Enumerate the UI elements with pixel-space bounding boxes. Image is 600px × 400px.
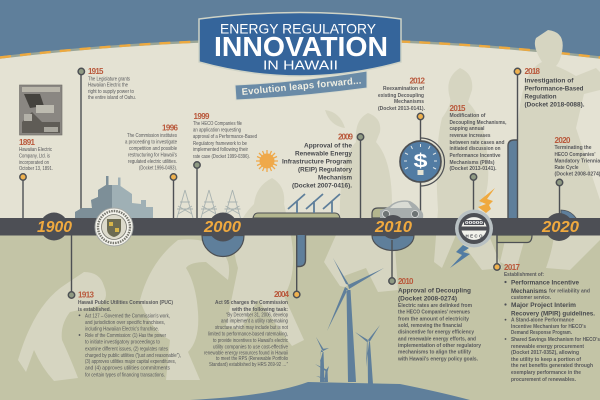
text: 1913: 1913 [78,290,95,300]
silhouette: leaf [325,110,345,128]
text: 2004: utility companies to use cost-effective [213,344,288,350]
text: 2018: Regulation [524,94,556,100]
2010 marker: 2010 [374,219,412,236]
text: 1996: regulated electric utilities. [128,159,177,165]
text: 2012: Reexamination of [383,86,424,92]
text: 1915 [88,67,136,101]
text: 2004: Standard) established by HRS 269-92 …” [209,362,288,368]
text: 2004: 2004 [274,290,290,299]
text: 2010: sold, removing the financial [398,323,462,329]
text: 2010: implementation of other regulatory [398,343,482,349]
text: 2015: Modification of [450,113,486,119]
text: 2009: 2009 [338,132,354,142]
text: 2004: “By December 31, 2006, develop [226,312,288,318]
text: 2015: Performance Incentive [450,153,500,159]
title line 1: ENERGY REGULATORY [220,20,377,36]
2000 marker: 2000 [203,219,241,236]
text: 1913: examine different issues, (2) regulates rates [85,346,168,352]
text: 2010 [397,277,482,362]
silhouette: walking figure [324,113,398,292]
pin: 1891 [20,174,26,218]
text: 1996 [125,124,179,172]
text: 2015: Decoupling Mechanisms, [450,120,507,126]
title line 2: INNOVATION [214,31,388,62]
text: 2004: renewable energy resources found in Hawaii [204,350,288,356]
text: 1913: charged by public utilities ("just and reasonable"), [85,353,181,359]
text: 2017: Incentive Mechanism for HECO's [511,324,586,330]
pin: 1915 [78,68,85,218]
2010 marker: blue lower ring [372,236,414,251]
text: 1913: and jurisdiction over specific franchises, [85,320,165,326]
text: 1999: rate case (Docket 1999-0396). [193,154,250,160]
small turbine [316,337,329,382]
text: 2004 [204,290,290,368]
text: 2004: limited to performance-based ratemaking, [208,332,288,338]
text: 2015: revenue increases [450,133,490,139]
text: 2009: Infrastructure Program [282,158,352,166]
text: 2017: the utility to keep a portion of [511,357,581,363]
text: 2018: Performance-Based [524,86,584,92]
text: 2020 [554,136,600,178]
text: 1913: Act 127 – Governed the Commission's work, [85,313,170,319]
text: 1913: and (4) approves utilities commitments [85,366,170,372]
text: 2009: Mechanism [318,174,352,182]
text: 1915: Hawaiian Electric the [88,82,128,88]
text: 2017: 2017 [504,263,521,272]
pin: 1913 [68,235,75,298]
text: 2015: Mechanisms (PIMs) [450,160,495,166]
pin: 2017 with olive panel [494,235,532,270]
text: 2010: (Docket 2008-0274) [398,296,457,302]
text: 2017 [504,263,600,383]
text: 2015: initiated discussion on [450,146,501,152]
icon: orange lightning [478,188,495,213]
icon: lightbulb dollar: $ [414,151,428,172]
ground [0,235,600,400]
title line 3: IN HAWAII [263,58,338,72]
text: 2004: with the following task: [231,307,288,313]
state seal [95,208,133,246]
text: 2017: (Docket 2017-0352), allowing [511,350,580,356]
text: 1915: the entire island of Oahu. [88,95,136,101]
text: 1913: for certain types of financing transactions. [85,372,165,378]
text: 1891: incorporated on [19,160,49,166]
text: 2012 [378,76,426,112]
text: 2010: and renewable energy efforts, and [398,336,476,342]
1900 marker [37,212,72,240]
text: 2015 [450,104,507,172]
pin: 2004 with blue tab [294,235,306,298]
text: 2017: Establishment of: [504,272,544,278]
text: 1996: (Docket 1996-0493). [139,166,177,172]
text: 2017: Major Project Interim [511,302,576,309]
big turbine [327,258,384,382]
text: 1891: October 13, 1891. [19,166,53,172]
text: 1913: is established. [78,307,111,313]
silhouette: hunched figure [140,239,229,380]
pin: 2012 [417,113,424,218]
2020 marker [540,210,580,241]
silhouette: crouching ape [18,272,106,381]
text: 2010: Electric rates are delinked from [398,303,472,309]
text: 1996: competition and possible [129,146,177,152]
photo: 1891 newspaper clipping [20,85,62,135]
silhouette: modern man [500,30,600,270]
subtitle ribbon: Evolution leaps forward... [241,76,362,98]
2020 marker: 2020 [541,219,579,236]
text: 2010: from the amount of electricity [398,316,470,322]
icon: wind turbines [315,258,384,384]
1900 marker: 1900 [37,219,72,236]
text: 1913: to initiate investigatory proceedings to [85,340,160,346]
text: 1915: 1915 [88,67,104,76]
text: 2009: (REIP) Regulatory [298,166,352,174]
text: 1996: restructuring for Hawaii's [128,152,177,158]
text: 2009: Renewable Energy [295,150,352,158]
text: 1913: including Hawaiian Electric's franchise. [85,326,159,332]
icon: blue lightning [450,245,470,268]
text: 2017: A Stand-alone Performance [511,318,574,324]
text: 1913: Role of the Commission: (1) Has the power [85,333,166,339]
sky border: dashed stripe [0,40,600,58]
text: 2017: exemplary performance in the [511,370,581,376]
text: 2017: Mechanisms [511,288,547,295]
text: 2017: Performance Incentive [511,280,579,286]
text: 1999: implemented following their [193,147,248,153]
2000 marker: blue lower ring [202,236,244,256]
text: 1915: The Legislature grants [88,76,130,82]
text: 1913: (3) approves utilities major capital expenditures, [85,359,176,365]
icon: HECO meter: 00000 [465,220,484,225]
text: 2017: procurement of renewables. [511,377,576,383]
icon: electric car [380,200,423,218]
text: 1891: Hawaiian Electric [19,147,52,153]
text: 2012: Mechanisms [394,99,424,105]
text: 1996: 1996 [162,124,179,132]
title banner [199,12,401,76]
text: 2017: renewable energy procurement [511,344,584,350]
icon: 2010 olive panel [372,208,400,218]
text: 1999: an application requesting [193,128,241,134]
bottom hill [190,382,470,400]
text: 1999 [193,112,257,160]
silhouette: stooped figure [226,178,304,346]
text: 2015: between rate cases and [450,140,505,146]
text: 2015: 2015 [450,104,466,113]
icon: HECO meter: HECO [466,234,483,238]
text: 1913 [78,290,181,378]
icon: sun [256,150,278,172]
text: 1999: Regulatory framework to be [193,141,247,147]
text: 2009 [282,132,354,190]
text: 2004: to meet the RPS (Renewable Portfolio [216,356,288,362]
text: 2017: customer service. [511,295,551,301]
text: 1999: 1999 [194,112,210,121]
text: 2018: (Docket 2018-0088). [524,102,585,108]
text: 2004: structure which may include but is not [215,325,288,331]
text: 2010: with Hawaii's energy policy goals. [397,356,478,362]
text: 2017: Recovery (MPIR) guidelines. [511,310,595,318]
smallest turbine [315,364,329,382]
text: 1999: The HECO Companies file [193,121,242,127]
text: 2010: Approval of Decoupling [398,288,471,294]
timeline bar [0,218,600,236]
text: 2012: 2012 [410,76,426,86]
text: 1913: Hawaii Public Utilities Commission (PUC) [78,300,173,306]
text: 1891: 1891 [19,138,36,147]
2000 marker [203,212,241,242]
text: 2009: Approval of the [304,142,352,150]
silhouette: upright figure [434,68,502,270]
text: 2020: Rate Cycle [554,165,578,171]
pin: 1999 [194,162,200,218]
text: 2010: the HECO Companies' revenues [398,310,470,316]
text: 2018 [524,67,585,108]
text: 2010: mechanisms to align the utility [398,350,472,356]
text: 1999: approval of a Performance-Based [193,134,257,140]
text: 1891 [19,138,53,172]
pin: 2020 [556,179,563,214]
text: 2018: 2018 [524,67,541,76]
icon: power plant [75,176,153,218]
text: 2017: for reliability and [549,288,591,294]
text: 2020: Terminating the [554,145,592,151]
medium turbine [355,325,380,384]
text: 2004: to provide incentives to Hawaii's electric [213,338,288,344]
text: 2018: Investigation of [524,78,574,84]
text: 1915: right to supply power to [88,89,134,95]
2010 marker [374,215,412,239]
text: 2004: Act 95 charges the Commission [215,300,288,306]
text: 2012: (Docket 2013-0141). [378,106,425,112]
text: 2017: Demand Response Program. [511,330,572,336]
text: 2010: disincentive for energy efficiency [398,330,475,336]
text: 2015: (Docket 2013-0141). [450,166,497,172]
text: 2015: capping annual [450,126,485,132]
text: 1996: a proceeding to investigate [125,140,177,146]
pin: 1996 [170,174,177,218]
text: 2009: (Docket 2007-0416). [292,182,352,190]
text: 2012: existing Decoupling [378,93,424,99]
text: 2020: 2020 [554,136,571,145]
icon: solar panels [253,194,340,218]
pin: 2010 [389,240,395,284]
pin: 2015 [470,174,477,212]
icon: lightbulb dollar [400,138,445,186]
pin: 2018 with blue tab [508,68,521,218]
text: 1891: Company, Ltd. is [19,154,50,160]
text: 2010: 2010 [398,277,414,286]
text: 2004: and implement a utility ratemaking [221,319,288,325]
text: 1996: The Commission institutes [127,133,177,139]
icon: HECO meter [455,210,493,248]
icon: transmission pylons [177,190,240,218]
pin: 2009 [357,134,364,218]
